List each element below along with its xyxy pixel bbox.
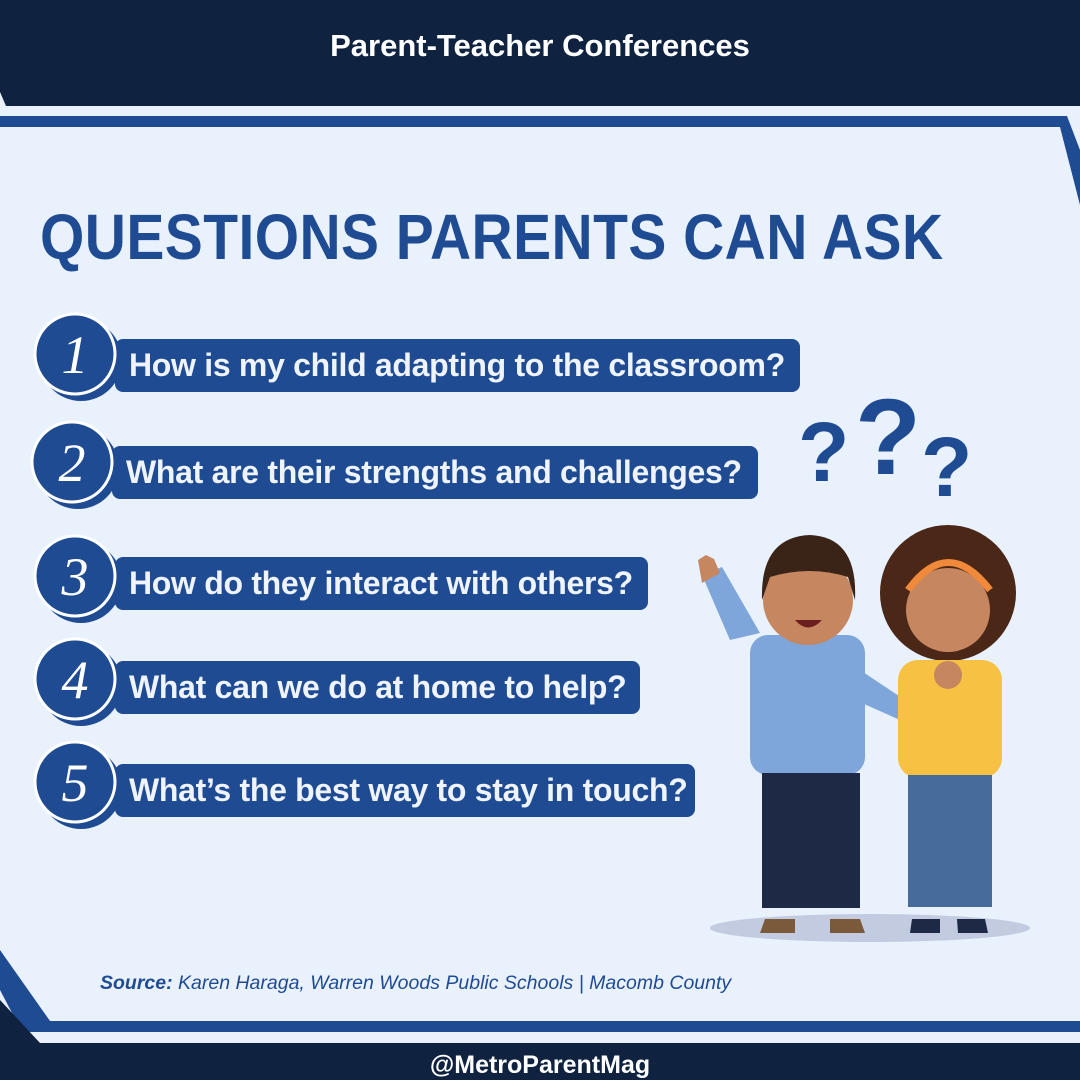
question 4: [115, 661, 640, 714]
illustration: question marks: ?: [798, 405, 849, 499]
number 4: [34, 638, 116, 726]
question 1: How is my child adapting to the classroom?: [129, 347, 785, 383]
number 1: 1: [62, 325, 88, 385]
question 1: [115, 339, 800, 392]
number 3: [34, 534, 116, 623]
question 5: [115, 764, 695, 817]
number 2: 2: [58, 433, 86, 493]
number 5: 5: [62, 753, 88, 813]
number 4: 4: [62, 650, 88, 710]
girl: [880, 525, 1016, 933]
main heading: QUESTIONS PARENTS CAN ASK: [40, 201, 944, 273]
number 2: [30, 420, 114, 509]
header title: Parent-Teacher Conferences: [330, 28, 750, 63]
illustration: two children: [698, 525, 1030, 942]
illustration: question marks: ?: [921, 420, 972, 514]
illustration: question marks: [798, 376, 972, 514]
number 3: 3: [60, 547, 88, 607]
footer handle: @MetroParentMag: [430, 1051, 650, 1079]
question 3: How do they interact with others?: [129, 565, 633, 601]
number 1: [34, 312, 118, 401]
boy: [698, 535, 905, 933]
illustration: question marks: ?: [855, 376, 921, 497]
question 5: What’s the best way to stay in touch?: [129, 772, 687, 808]
source: Source: Karen Haraga, Warren Woods Public Schools | Macomb County: [100, 972, 731, 994]
question 2: What are their strengths and challenges?: [126, 454, 742, 490]
question 3: [115, 557, 648, 610]
number 5: [34, 740, 116, 829]
question 4: What can we do at home to help?: [129, 669, 626, 705]
question 2: [112, 446, 758, 499]
